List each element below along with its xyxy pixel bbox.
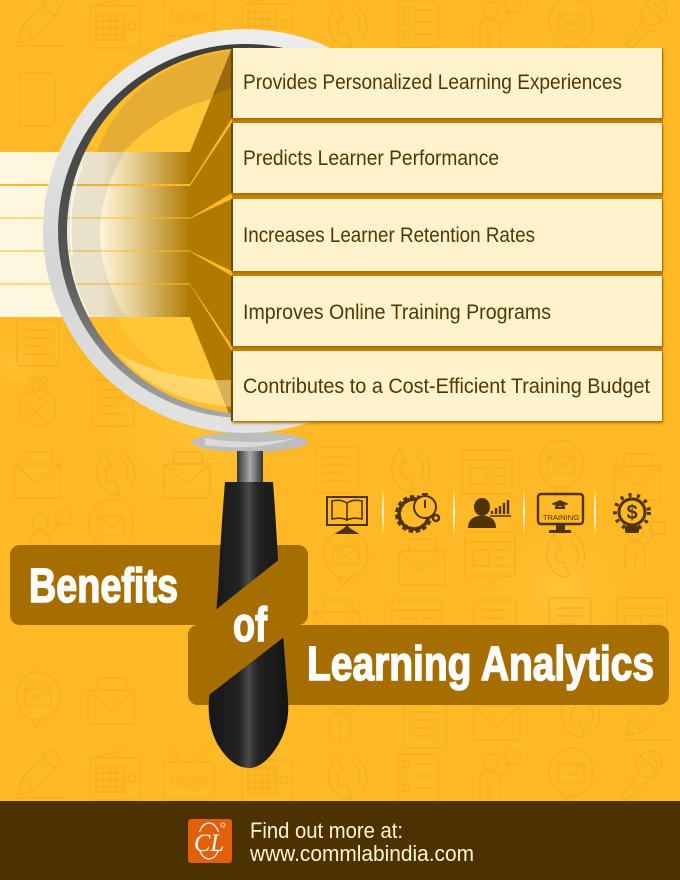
title: benefits: Benefits — [29, 560, 178, 613]
footer bar — [0, 801, 680, 880]
magnifying glass lens interior — [67, 48, 433, 414]
footer text: www.commlabindia.com — [249, 841, 474, 866]
background doodle icon pattern: NEWS — [170, 774, 209, 789]
background doodle icon pattern: NEWS — [170, 10, 209, 25]
icon: dollar light bulb — [615, 495, 649, 533]
logo: CL: CL — [194, 830, 224, 857]
darker translucent top of connector — [213, 48, 232, 95]
footer text — [249, 818, 474, 866]
panel: improves online training programs — [231, 276, 663, 348]
diagonal ribbon across the handle — [200, 558, 295, 695]
panel: improves online training programs: Improves Online Training Programs — [243, 301, 551, 324]
lens glass sheen — [68, 152, 232, 407]
icon: dollar light bulb: $ — [626, 502, 638, 524]
magnifying glass handle — [209, 482, 288, 768]
panel: contributes to a cost-efficient training budget: Contributes to a Cost-Efficient Training Budget — [243, 375, 650, 398]
panel: contributes to a cost-efficient training budget — [231, 351, 663, 423]
title box: benefits — [10, 545, 308, 625]
panel: predicts learner performance — [231, 123, 663, 195]
data strip passing through the lens — [0, 118, 232, 351]
icon: businessman with bar chart — [468, 498, 511, 528]
magnifying glass metal ring — [43, 29, 447, 433]
icon: training monitor — [538, 494, 583, 533]
brown connector shape behind the panels — [190, 48, 232, 421]
title: of: of — [233, 599, 268, 652]
title box: learning analytics — [188, 625, 669, 705]
icon: gears and stopwatch — [398, 494, 439, 530]
icon: training monitor: TRAINING — [543, 513, 579, 522]
backing behind the panels — [232, 48, 663, 420]
icon: book on monitor — [327, 497, 367, 534]
magnifying glass collar — [192, 432, 308, 485]
icon row — [327, 487, 649, 537]
panel: provides personalized learning experiences: Provides Personalized Learning Experiences — [243, 71, 622, 94]
footer text: Find out more at: — [250, 818, 403, 843]
panel: increases learner retention rates — [231, 199, 663, 273]
panel: provides personalized learning experiences — [231, 48, 663, 120]
panel: increases learner retention rates: Increases Learner Retention Rates — [243, 224, 535, 247]
panel: predicts learner performance: Predicts Learner Performance — [243, 147, 499, 170]
logo: CL — [188, 819, 232, 863]
